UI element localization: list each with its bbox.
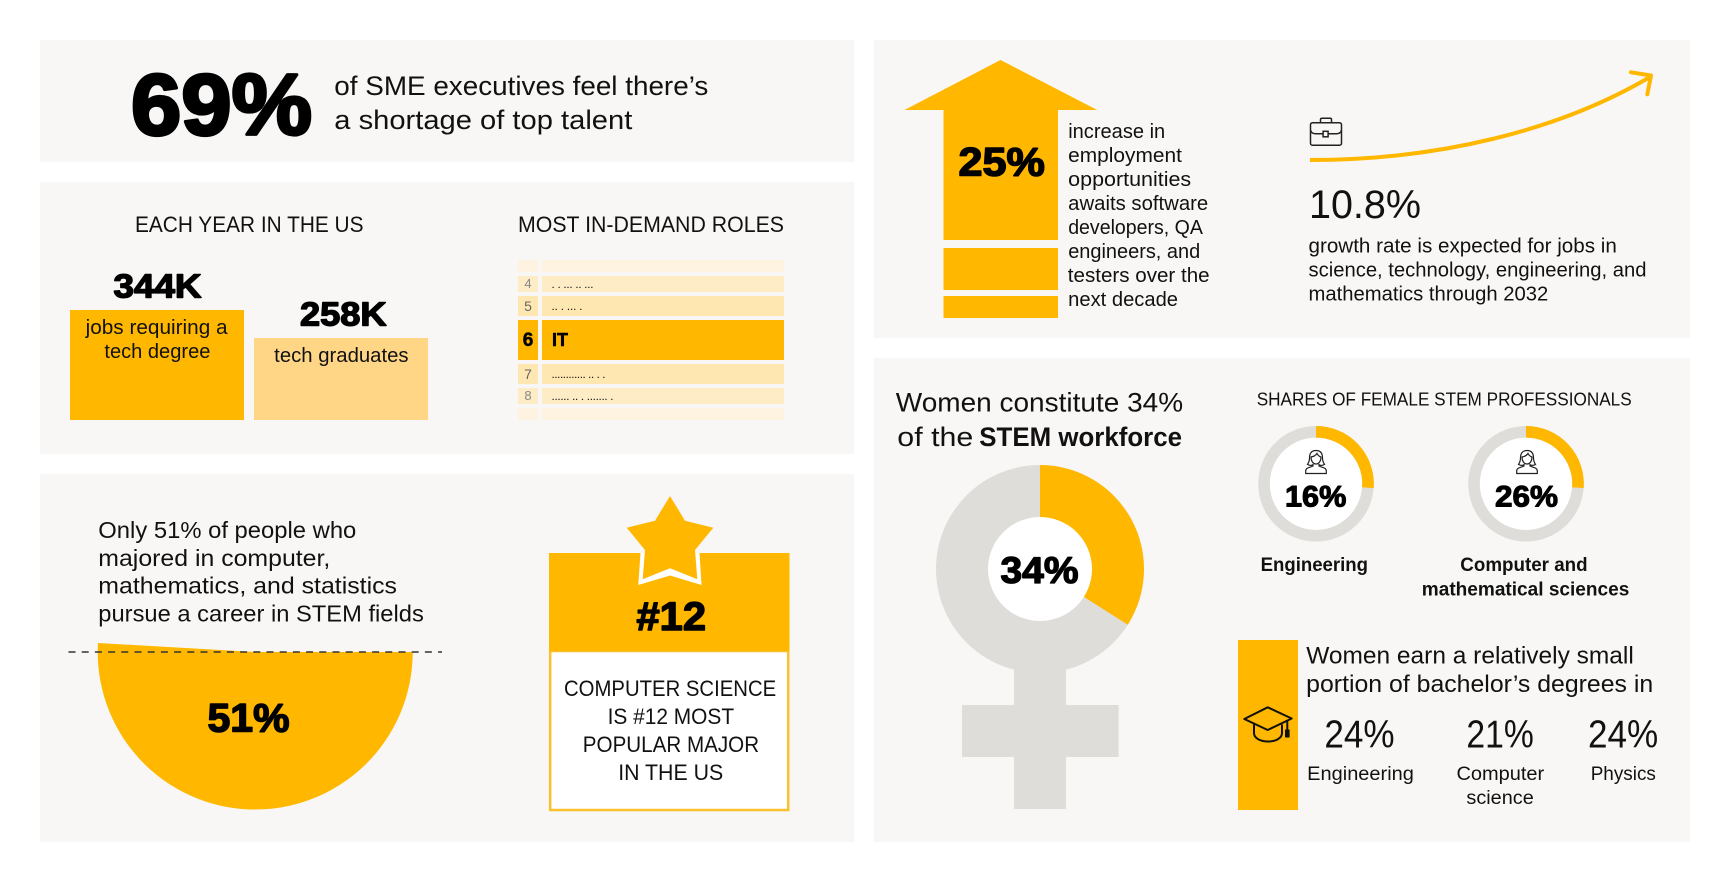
bar: tech graduates — [254, 296, 428, 420]
badge: #12 most popular major: POPULAR MAJOR — [583, 732, 759, 757]
table: ranked roles: .. . ... . — [552, 303, 582, 312]
badge: #12 most popular major: COMPUTER SCIENCE — [564, 676, 776, 701]
text: women earn a small portion of degrees: Women earn a relatively small — [1306, 642, 1634, 670]
panel: employment growth — [874, 40, 1690, 338]
stat: engineering 24% — [1307, 714, 1414, 785]
stat: physics 24% — [1588, 714, 1658, 785]
chart: venus symbol with 34% donut — [936, 465, 1144, 809]
stat: computer science 21%: science — [1466, 787, 1534, 809]
text: increase in employment opportunities: next decade — [1068, 289, 1178, 311]
text: increase in employment opportunities: increase in — [1068, 121, 1165, 143]
stat: computer science 21% — [1456, 714, 1545, 809]
bar: jobs requiring a tech degree — [70, 268, 244, 420]
text: increase in employment opportunities — [1068, 121, 1210, 311]
text: women earn a small portion of degrees — [1306, 642, 1653, 698]
panel: women in STEM — [874, 358, 1690, 842]
text: increase in employment opportunities: opportunities — [1068, 169, 1191, 191]
bachelor's degrees block — [1238, 640, 1658, 810]
stat: engineering 24%: Engineering — [1307, 763, 1414, 785]
stat: physics 24%: Physics — [1591, 763, 1656, 785]
table: ranked roles: 7 — [524, 366, 532, 382]
table: ranked roles: IT — [552, 330, 568, 350]
text: only 51% pursue a career in STEM: Only 51% of people who — [98, 517, 356, 543]
stat: computer science 21%: Computer — [1456, 763, 1545, 785]
badge: #12 most popular major: IS #12 MOST — [608, 704, 734, 729]
text: increase in employment opportunities: testers over the — [1068, 265, 1210, 287]
table: ranked roles: 4 — [524, 276, 532, 291]
badge: #12 most popular major: IN THE US — [618, 760, 723, 785]
chart: 51% half pie — [98, 643, 413, 810]
text: only 51% pursue a career in STEM: pursue a career in STEM fields — [98, 600, 424, 626]
heading: women constitute 34%: of the — [897, 422, 973, 452]
bar: jobs requiring a tech degree: 344K — [114, 268, 202, 304]
stat: computer science 21%: 21% — [1466, 714, 1534, 756]
table: ranked roles: ...... .. . ....... . — [552, 393, 613, 402]
text: growth rate description: growth rate is expected for jobs in — [1308, 236, 1617, 258]
bar: tech graduates: 258K — [300, 296, 387, 332]
table: ranked roles: 8 — [524, 388, 532, 403]
text: only 51% pursue a career in STEM — [98, 517, 424, 626]
table: ranked roles — [518, 260, 784, 420]
panel: career in STEM and popular major — [40, 474, 854, 842]
donut: computer and mathematical sciences — [1422, 432, 1629, 600]
badge: #12 most popular major — [549, 496, 790, 810]
dashed baseline — [68, 651, 442, 653]
text: growth rate description — [1308, 236, 1646, 306]
table: ranked roles: 6 — [523, 330, 533, 351]
arrow: growth curve — [1310, 72, 1651, 160]
text: only 51% pursue a career in STEM: majored in computer, — [98, 545, 330, 571]
table: ranked roles: 5 — [524, 298, 532, 314]
donut: computer and mathematical sciences: 26% — [1495, 480, 1558, 514]
donut: computer and mathematical sciences: mathematical sciences — [1422, 578, 1629, 600]
table: ranked roles: ............ .. . . — [552, 371, 605, 380]
heading: women constitute 34% — [896, 388, 1183, 452]
heading: women constitute 34%: Women constitute 34% — [896, 388, 1183, 418]
bar: jobs requiring a tech degree: jobs requiring a — [85, 317, 229, 339]
text: talent shortage statement: of SME executives feel there’s — [334, 71, 708, 101]
heading: each year in the US: EACH YEAR IN THE US — [135, 212, 364, 237]
heading: most in-demand roles: MOST IN-DEMAND ROLES — [518, 212, 784, 237]
donut: engineering: Engineering — [1261, 554, 1368, 576]
icon: graduation cap on yellow bar — [1238, 640, 1298, 810]
table: ranked roles: . . ... .. ... — [552, 281, 593, 290]
chart label: 51%: 51% — [208, 696, 290, 740]
text: increase in employment opportunities: employment — [1068, 145, 1182, 167]
icon: up arrow with segmented shaft — [904, 60, 1097, 318]
bar: jobs requiring a tech degree: tech degree — [104, 341, 210, 363]
badge: #12 most popular major: #12 — [636, 595, 706, 639]
heading: women constitute 34%: STEM workforce — [979, 422, 1182, 452]
text: talent shortage statement — [334, 71, 708, 135]
text: growth rate description: science, technology, engineering, and — [1308, 260, 1646, 282]
stat: engineering 24%: 24% — [1324, 714, 1395, 756]
stat: 10.8%: 10.8% — [1309, 183, 1421, 227]
big stat: 69%: 69% — [131, 58, 312, 154]
text: women earn a small portion of degrees: portion of bachelor’s degrees in — [1306, 671, 1653, 698]
donut: engineering: 16% — [1285, 480, 1346, 514]
panel: talent shortage — [40, 40, 854, 162]
bar: tech graduates: tech graduates — [274, 345, 409, 367]
chart: venus symbol with 34% donut: 34% — [1000, 550, 1078, 591]
panel: each year and in-demand roles — [40, 182, 854, 454]
text: increase in employment opportunities: developers, QA — [1068, 217, 1204, 239]
stat: physics 24%: 24% — [1588, 714, 1658, 756]
text: only 51% pursue a career in STEM: mathematics, and statistics — [98, 572, 397, 598]
text: talent shortage statement: a shortage of top talent — [334, 105, 633, 135]
donut: engineering — [1261, 432, 1368, 576]
text: growth rate description: mathematics through 2032 — [1308, 284, 1548, 306]
icon: briefcase — [1310, 118, 1342, 145]
icon: woman — [1517, 450, 1537, 474]
icon: woman — [1306, 450, 1326, 474]
stat: 25%: 25% — [958, 140, 1045, 184]
text: increase in employment opportunities: awaits software — [1068, 193, 1208, 215]
heading: shares of female STEM professionals: SHARES OF FEMALE STEM PROFESSIONALS — [1257, 388, 1632, 410]
donut: computer and mathematical sciences: Computer and — [1460, 554, 1588, 576]
text: increase in employment opportunities: engineers, and — [1068, 241, 1200, 263]
